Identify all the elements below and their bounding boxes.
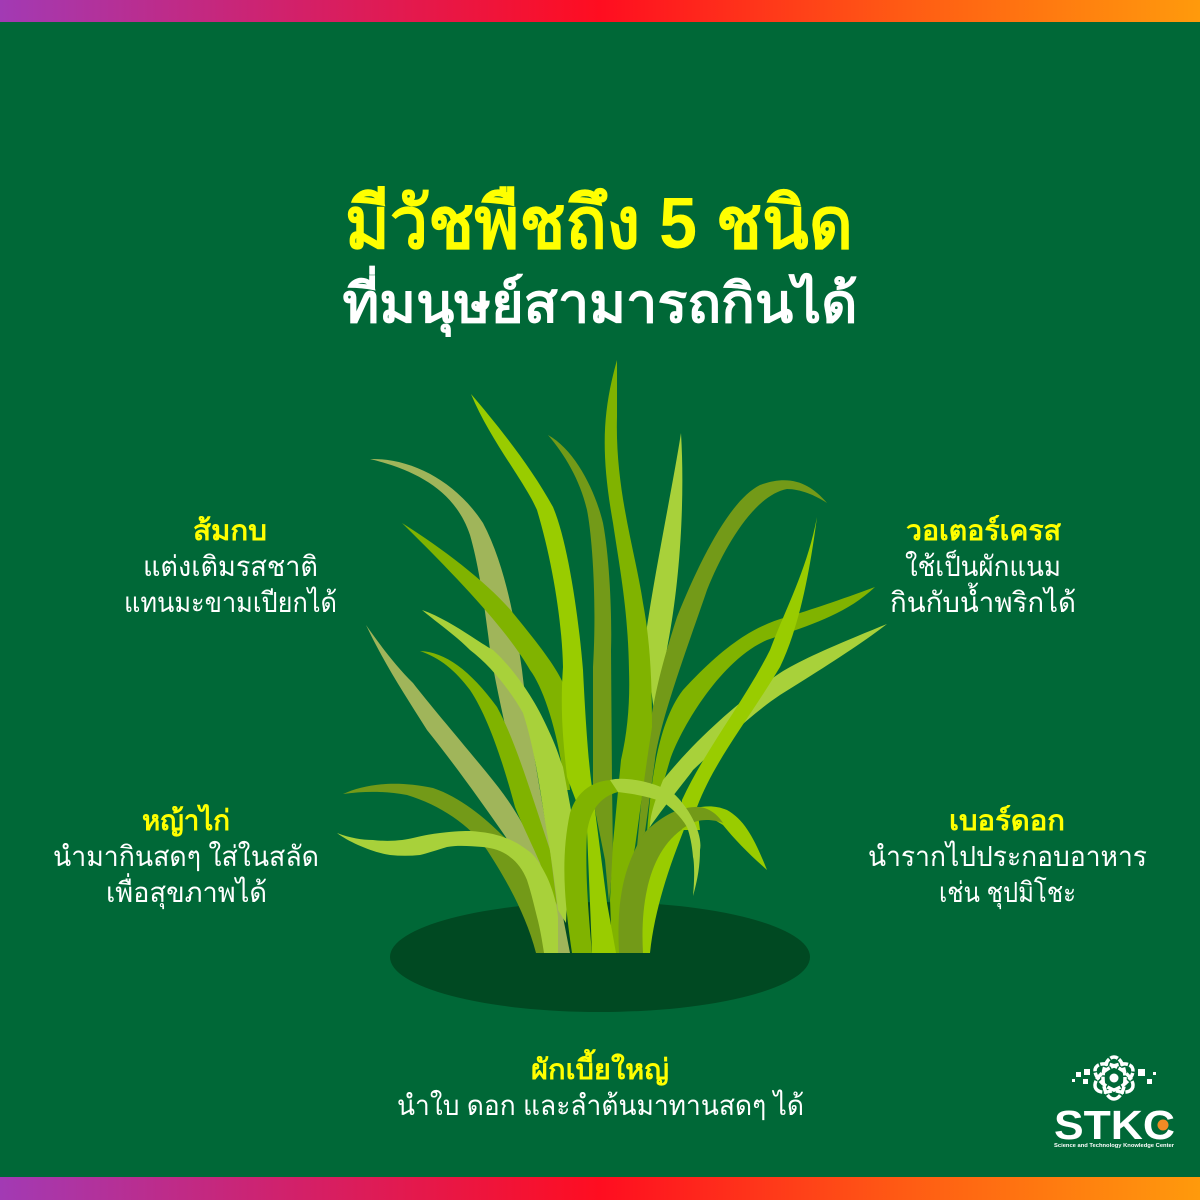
text block: วอเตอร์เครส [890,515,1076,618]
text block: เบอร์ดอก: เช่น ชุปมิโชะ [939,876,1076,910]
text block: เบอร์ดอก: นำรากไปประกอบอาหาร [868,841,1147,872]
bottom gradient bar [0,1177,1200,1200]
text block: วอเตอร์เครส: ใช้เป็นผักแนม [905,549,1061,582]
text block: หญ้าไก่: เพื่อสุขภาพได้ [106,873,267,910]
logo tagline: Science and Technology Knowledge Center [1054,1143,1175,1149]
text block: ผักเบี้ยใหญ่: ผักเบี้ยใหญ่ [531,1048,669,1086]
ground shadow ellipse [390,902,810,1012]
text block: ผักเบี้ยใหญ่: นำใบ ดอก และลำต้นมาทานสดๆ ได้ [397,1089,804,1121]
text block: หญ้าไก่ [53,804,319,910]
text block: วอเตอร์เครส: วอเตอร์เครส [906,515,1062,546]
logo: STKC [1054,1057,1175,1149]
text block: ผักเบี้ยใหญ่ [397,1048,804,1121]
text block: หญ้าไก่: หญ้าไก่ [142,804,230,837]
text block: เบอร์ดอก [868,805,1147,910]
title: มีวัชพืชถึง 5 ชนิด [345,184,853,264]
text block: เบอร์ดอก: เบอร์ดอก [949,805,1065,836]
icon: atom emblem [1072,1057,1156,1099]
logo wordmark: STKC [1054,1102,1175,1148]
top gradient bar [0,0,1200,22]
text block: วอเตอร์เครส: กินกับน้ำพริกได้ [890,582,1076,618]
title: ที่มนุษย์สามารถกินได้ [342,265,858,338]
title [342,184,858,338]
text block: หญ้าไก่: นำมากินสดๆ ใส่ในสลัด [53,840,319,872]
text block: ส้มกบ [124,515,337,618]
text block: ส้มกบ: แต่งเติมรสชาติ [143,551,318,582]
text block: ส้มกบ: ส้มกบ [193,515,267,546]
logo orange dot [1158,1120,1168,1130]
illustration: grass clump [337,360,887,953]
text block: ส้มกบ: แทนมะขามเปียกได้ [124,587,337,618]
